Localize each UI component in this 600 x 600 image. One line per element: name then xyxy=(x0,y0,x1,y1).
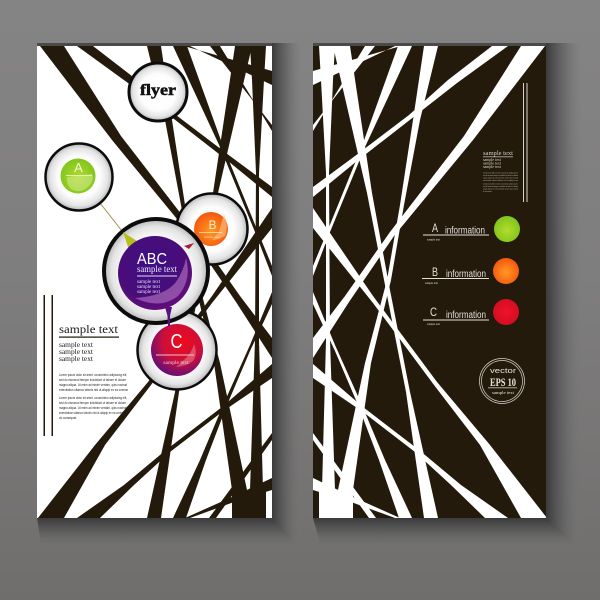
text block: body copy: magna aliqua. Ut enim ad minim veniam, quis nostrud xyxy=(483,176,519,180)
circle: ABC: sample text xyxy=(137,290,161,295)
connector: A to ABC xyxy=(87,188,122,231)
line network: dark xyxy=(38,46,272,518)
text block: sample text xyxy=(483,150,513,169)
circle: B xyxy=(176,194,248,264)
text block: body copy: do consequat. xyxy=(59,415,77,420)
badge: EPS 10: vector xyxy=(490,368,517,375)
text block: body copy: Lorem ipsum dolor sit amet, consectetur adipiscing elit, xyxy=(483,172,518,174)
row: A information: A xyxy=(432,223,438,235)
red dot xyxy=(493,299,519,325)
panel: left flyer xyxy=(37,46,272,518)
row: A information: sample text xyxy=(427,238,440,242)
circle: C xyxy=(138,310,216,390)
row: B information: sample text xyxy=(425,281,438,285)
text block: sample text: sample text xyxy=(59,347,94,356)
circle: ABC xyxy=(104,219,208,326)
text block: sample text: sample text xyxy=(483,165,502,169)
row: B information: B xyxy=(432,267,438,279)
text block: body copy: exercitation ullamco laboris nisi ut aliquip ex ea commo xyxy=(59,410,126,415)
A label: A xyxy=(74,160,83,175)
badge: EPS 10: EPS 10 xyxy=(490,375,516,389)
orange dot xyxy=(493,258,519,284)
right vertical rules xyxy=(523,83,528,202)
text block: body copy: magna aliqua. Ut enim ad minim veniam, quis nostrud xyxy=(59,405,127,410)
circle: A xyxy=(46,144,112,210)
text block: body copy: sed do eiusmod tempor incididunt ut labore et dolore xyxy=(59,377,127,382)
row: A information: information xyxy=(445,226,485,236)
text block: body copy xyxy=(59,372,129,420)
badge: EPS 10 xyxy=(480,358,524,404)
text block: body copy: Lorem ipsum dolor sit amet, consectetur adipiscing elit, xyxy=(59,395,127,400)
circle: ABC: sample text xyxy=(137,264,177,274)
B label: B xyxy=(208,218,217,232)
shadow: right panel xyxy=(313,43,582,550)
text block: body copy: exercitation ullamco laboris nisi ut aliquip ex ea commo xyxy=(59,387,129,392)
text block: body copy: sed do eiusmod tempor incididunt ut labore et dolore xyxy=(483,185,519,188)
text block: sample text: sample text xyxy=(483,158,502,162)
circle: B: sample text xyxy=(204,235,220,239)
ABC label: ABC xyxy=(137,251,167,268)
row: A information xyxy=(423,216,520,242)
text block: body copy: sed do eiusmod tempor incididunt ut labore et dolore xyxy=(59,400,127,405)
text block: body copy: Lorem ipsum dolor sit amet, consectetur adipiscing elit, xyxy=(483,182,518,186)
text block: body copy: Lorem ipsum dolor sit amet, consectetur adipiscing elit, xyxy=(59,372,127,377)
C label: C xyxy=(170,331,182,353)
text block: body copy: magna aliqua. Ut enim ad minim veniam, quis nostrud xyxy=(59,382,127,387)
text block: sample text: sample text xyxy=(483,150,513,157)
row: C information: sample text xyxy=(427,322,440,326)
panel: right flyer xyxy=(313,46,547,518)
text block: sample text: sample text xyxy=(59,354,94,363)
flyer label: flyer xyxy=(140,82,176,99)
circle: ABC: sample text xyxy=(137,285,161,290)
row: B information xyxy=(422,258,519,285)
badge: EPS 10: sample text xyxy=(492,390,515,395)
row: B information: information xyxy=(446,269,486,280)
text block: body copy: do consequat. xyxy=(483,190,492,193)
left vertical rules xyxy=(44,295,53,436)
text block: body copy: sed do eiusmod tempor incididunt ut labore et dolore xyxy=(483,174,519,177)
circle: C: sample text xyxy=(163,360,189,366)
row: C information: information xyxy=(446,310,486,321)
text block: body copy xyxy=(483,172,519,193)
line network: white xyxy=(313,46,547,518)
green dot xyxy=(494,216,520,242)
circle: flyer xyxy=(129,63,187,121)
text block: body copy: magna aliqua. Ut enim ad minim veniam, quis nostrud xyxy=(483,188,519,190)
text block: sample text xyxy=(59,322,119,363)
text block: sample text: sample text xyxy=(483,162,502,166)
row: C information: C xyxy=(430,307,437,319)
circle: ABC: sample text xyxy=(137,280,161,285)
text block: body copy: exercitation ullamco laboris nisi ut aliquip ex ea xyxy=(483,179,519,182)
text block: sample text: sample text xyxy=(59,340,94,349)
row: C information xyxy=(423,299,519,326)
text block: sample text: sample text xyxy=(59,322,119,336)
shadow: left panel xyxy=(37,43,302,550)
